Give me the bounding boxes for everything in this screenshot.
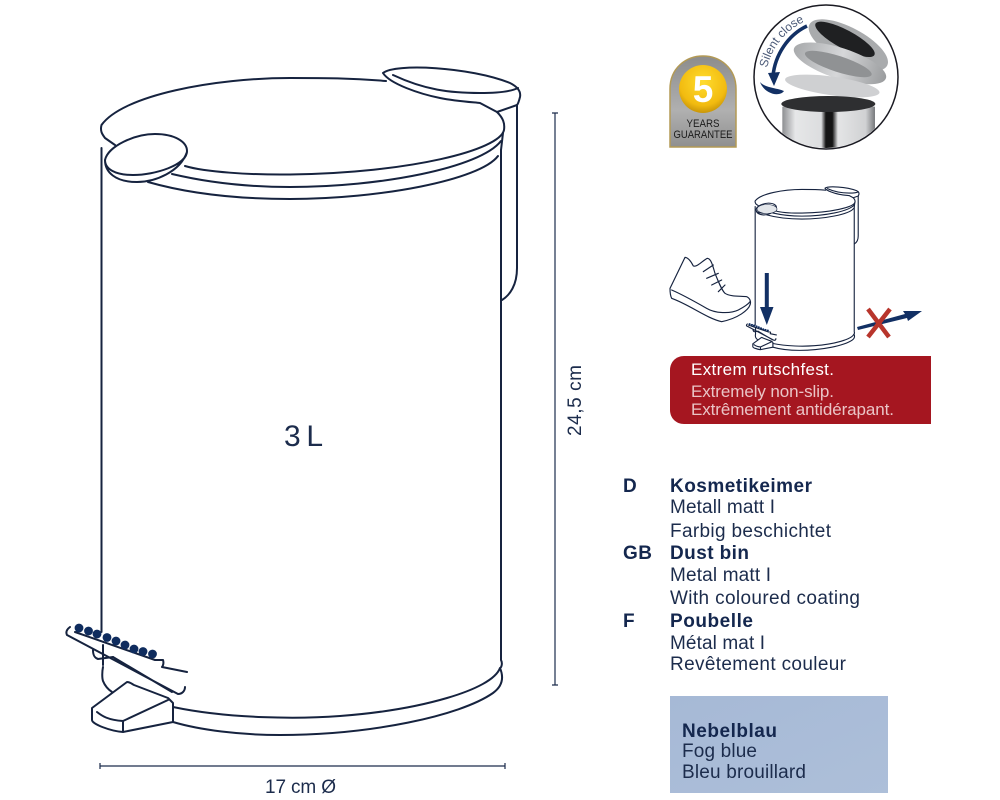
rear hinge strap bbox=[502, 105, 517, 300]
lid rims bbox=[148, 133, 503, 199]
direction arrow bbox=[857, 311, 922, 330]
bin body bbox=[102, 148, 502, 735]
English line: Extremely non-slip. bbox=[691, 382, 834, 401]
shoe bbox=[670, 257, 751, 322]
pedal plate bbox=[66, 627, 187, 694]
French line: Extrêmement antidérapant. bbox=[691, 400, 894, 419]
small bin bbox=[746, 187, 859, 350]
pedal arm bbox=[93, 650, 113, 692]
width dimension bbox=[100, 763, 505, 798]
French description bbox=[623, 611, 847, 675]
number five: 5 bbox=[693, 69, 713, 110]
non-slip banner bbox=[670, 356, 931, 424]
guarantee badge bbox=[670, 56, 736, 147]
height value: 24,5 cm bbox=[565, 365, 586, 436]
silent close photo bbox=[753, 4, 899, 150]
French description: F bbox=[623, 611, 635, 632]
colour names: Nebelblau bbox=[682, 721, 777, 742]
capacity label: 3 L bbox=[284, 420, 323, 453]
silent close label bbox=[767, 21, 806, 68]
French description: Métal mat I bbox=[670, 633, 765, 654]
rear hinge tab bbox=[383, 68, 520, 112]
guarantee text: YEARS bbox=[686, 118, 720, 130]
English description: With coloured coating bbox=[670, 588, 860, 609]
German description: Farbig beschichtet bbox=[670, 521, 832, 542]
height dimension bbox=[552, 113, 586, 685]
press arrow bbox=[760, 273, 774, 325]
English description: Metal matt I bbox=[670, 565, 771, 586]
yellow coin bbox=[679, 65, 727, 113]
silent close photo: Silent close bbox=[760, 17, 803, 67]
German description: Kosmetikeimer bbox=[670, 476, 813, 497]
pedal foot bbox=[92, 682, 173, 732]
anti-slip dots bbox=[75, 624, 157, 658]
German description: Metall matt I bbox=[670, 497, 775, 518]
curved arrow bbox=[773, 26, 807, 76]
English description: GB bbox=[623, 543, 652, 564]
left lid knob bbox=[105, 134, 187, 182]
English description: Dust bin bbox=[670, 543, 749, 564]
main bin line drawing bbox=[66, 68, 520, 735]
French description: Poubelle bbox=[670, 611, 753, 632]
French description: Revêtement couleur bbox=[670, 654, 847, 675]
German line: Extrem rutschfest. bbox=[691, 360, 834, 379]
small bin usage diagram bbox=[670, 187, 922, 350]
stacked lids and bin bbox=[781, 19, 888, 148]
colour swatch: Bleu brouillard bbox=[682, 762, 806, 783]
colour swatch: Fog blue bbox=[682, 741, 757, 762]
bin lid bbox=[101, 78, 504, 175]
German description: D bbox=[623, 476, 637, 497]
red cross bbox=[868, 309, 890, 337]
English description bbox=[623, 543, 860, 609]
foot pedal bbox=[66, 624, 187, 732]
width value: 17 cm Ø bbox=[265, 777, 336, 798]
product description bbox=[623, 476, 860, 675]
German description bbox=[623, 476, 832, 542]
knob shading bbox=[757, 204, 777, 214]
feather bbox=[760, 82, 784, 94]
colour swatch bbox=[670, 696, 888, 793]
guarantee badge: GUARANTEE bbox=[674, 129, 732, 141]
